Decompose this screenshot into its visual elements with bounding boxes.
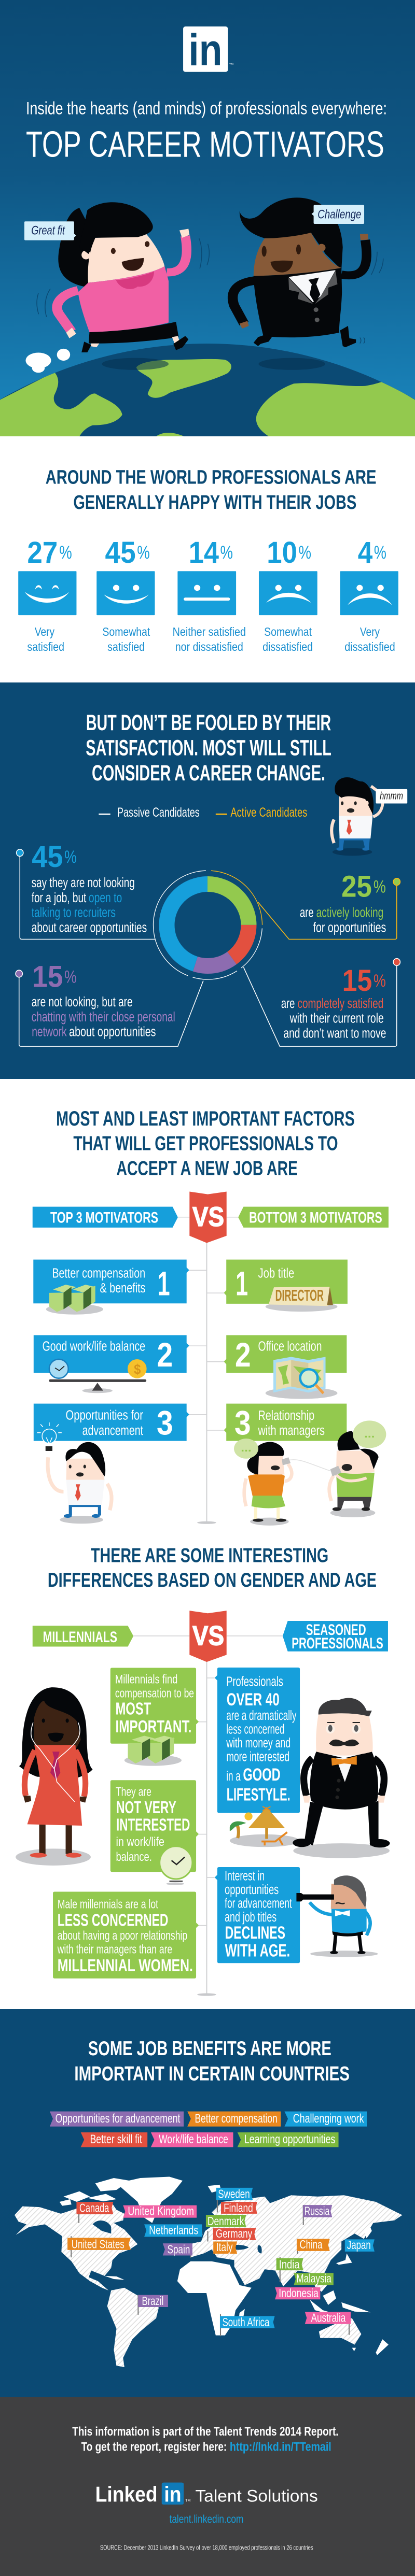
icon: LinkedIn logo: in <box>188 25 223 75</box>
callout: 15% completely satisfied: are <box>281 997 295 1011</box>
flag: United States <box>67 2236 131 2257</box>
logo: LinkedIn Talent Solutions: Linked <box>95 2482 158 2507</box>
stat: 27% very satisfied: satisfied <box>27 640 64 653</box>
card: relationship with managers <box>206 1403 347 1442</box>
card: less concerned: Male millennials are a lot <box>58 1898 158 1912</box>
stat: 14% neither: 14 <box>189 536 219 570</box>
panel: career change background <box>0 682 415 1079</box>
banner: bottom 3 motivators <box>238 1207 389 1228</box>
callout: 25% actively looking: 25 <box>341 870 372 904</box>
flag: United Kingdom: United Kingdom <box>128 2204 194 2217</box>
legend: benefit ribbons: Work/life balance <box>159 2132 228 2146</box>
banner: millennials: MILLENNIALS <box>43 1629 117 1646</box>
flag: Canada <box>76 2201 113 2223</box>
flag: Denmark: Denmark <box>208 2214 244 2228</box>
callout: 25% actively looking: for opportunities <box>313 920 386 935</box>
stat: 27% very satisfied: 27 <box>27 536 58 570</box>
stat: 10% somewhat dissatisfied: dissatisfied <box>262 640 313 653</box>
flag: Russia <box>303 2204 332 2225</box>
card: relationship with managers: Relationship <box>258 1408 314 1423</box>
panel: career change <box>16 710 407 1130</box>
stat: 45% somewhat satisfied: % <box>137 543 150 563</box>
callout: 45% open to recruiters: about career opportunities <box>32 920 147 935</box>
heading: don't be fooled <box>86 710 331 785</box>
flag: Brazil <box>137 2294 168 2315</box>
flag: Australia <box>305 2311 351 2335</box>
card: less concerned: with their managers than are <box>57 1942 172 1956</box>
callout: great fit: Great fit <box>31 223 65 237</box>
card: interest declines with age: Interest in <box>225 1869 265 1884</box>
callout: 25% actively looking: actively looking <box>316 905 383 920</box>
card: less concerned: about having a poor relationship <box>58 1929 187 1943</box>
flag: Italy: Italy <box>216 2240 233 2254</box>
stat: 27% very satisfied: Very <box>35 625 55 638</box>
logo: LinkedIn Talent Solutions: TM <box>185 2498 190 2503</box>
legend: benefit ribbons: Learning opportunities <box>244 2132 335 2146</box>
card: over 40 good lifestyle: with money and <box>226 1736 290 1750</box>
character: mustached man <box>293 1698 390 1858</box>
card: better compensation: & benefits <box>100 1281 146 1296</box>
flag: India: India <box>279 2258 300 2271</box>
timeline spine <box>133 1635 283 1996</box>
panel: countries background <box>0 2009 415 2397</box>
stat: 10% somewhat dissatisfied <box>259 536 317 653</box>
card: not very interested: balance. <box>116 1850 152 1864</box>
card: job title: Job title <box>258 1266 294 1280</box>
stat: 45% somewhat satisfied: satisfied <box>107 640 145 653</box>
card: not very interested <box>110 1780 206 1885</box>
icon: dust clouds <box>25 349 70 373</box>
stat: 45% somewhat satisfied <box>96 536 155 653</box>
logo: LinkedIn Talent Solutions <box>95 2482 318 2507</box>
stat: 10% somewhat dissatisfied: 10 <box>267 536 297 570</box>
card: over 40 good lifestyle: GOOD <box>243 1765 281 1785</box>
flag: Sweden <box>216 2187 253 2212</box>
flag: Russia: Russia <box>305 2204 330 2217</box>
call to action: To get the report, register here: <box>81 2440 227 2454</box>
stat: 14% neither <box>173 536 246 653</box>
flag: Brazil: Brazil <box>142 2294 163 2308</box>
legend: benefit ribbons: Better compensation <box>195 2112 278 2126</box>
card: over 40 good lifestyle: OVER 40 <box>227 1690 280 1710</box>
character: millennial woman <box>16 1687 93 1866</box>
character: man with spyglass <box>296 1875 378 1957</box>
card: relationship with managers: with managers <box>258 1424 325 1438</box>
callout: 15% completely satisfied: with their current role <box>289 1011 384 1026</box>
stat: 4% very dissatisfied: dissatisfied <box>344 640 395 653</box>
heading: most and least, remaining lines: ACCEPT A NEW JOB ARE <box>116 1157 298 1179</box>
character: two people talking through cans: ... <box>241 1442 252 1454</box>
flag: Netherlands: Netherlands <box>149 2224 198 2237</box>
panel: countries <box>15 2038 403 2367</box>
badge: VS: VS <box>192 1202 224 1232</box>
globe <box>0 344 415 436</box>
logo: LinkedIn Talent Solutions: Talent Solutions <box>196 2487 318 2505</box>
character: thinking man <box>331 777 383 856</box>
stat: 4% very dissatisfied <box>340 536 398 653</box>
stat: 10% somewhat dissatisfied: Somewhat <box>264 625 312 638</box>
card: not very interested: They are <box>116 1785 151 1799</box>
heading: gender and age <box>48 1544 377 1591</box>
flag: Canada: Canada <box>79 2201 109 2214</box>
card: opportunities for advancement: Opportunities for <box>66 1408 143 1422</box>
card: work life balance: 2 <box>157 1335 173 1374</box>
flag: Sweden: Sweden <box>218 2187 250 2200</box>
panel: job satisfaction background <box>0 436 415 683</box>
card: interest declines with age: DECLINES <box>225 1923 285 1943</box>
banner: top 3 motivators: TOP 3 MOTIVATORS <box>50 1209 158 1227</box>
card: opportunities for advancement: advancement <box>82 1424 143 1438</box>
callout: 45% open to recruiters: say they are not looking <box>32 876 135 890</box>
callout: 15% completely satisfied: completely satisfied <box>297 997 383 1011</box>
card: opportunities for advancement: 3 <box>157 1403 173 1442</box>
callout: great fit <box>24 221 76 240</box>
callout: 25% actively looking: % <box>374 877 386 897</box>
callout: challenge <box>312 205 364 224</box>
callout: 45% open to recruiters: for a job, but <box>32 891 86 905</box>
flag: Germany: Germany <box>216 2227 252 2240</box>
flag: Spain <box>163 2242 192 2258</box>
callout: 15% completely satisfied: % <box>374 971 386 991</box>
flag: Australia: Australia <box>311 2311 346 2325</box>
callout: 45% open to recruiters: talking to recruiters <box>32 905 116 920</box>
flag: Germany <box>207 2227 256 2242</box>
heading: gender and age: THERE ARE SOME INTERESTING <box>91 1544 328 1567</box>
banner: seasoned professionals <box>283 1621 388 1652</box>
card: office location: Office location <box>258 1340 322 1354</box>
callout: 15% chatting with network: chatting with their close personal <box>32 1010 175 1024</box>
card: interest declines with age: for advancement <box>225 1897 292 1911</box>
card: not very interested: INTERESTED <box>116 1816 190 1835</box>
card: job title: DIRECTOR <box>275 1287 324 1304</box>
card: over 40 good lifestyle <box>206 1668 300 1813</box>
callout: hmmm: hmmm <box>380 790 403 802</box>
logo: LinkedIn Talent Solutions: in <box>164 2482 181 2507</box>
card: interest declines with age: opportunities <box>225 1883 279 1897</box>
stat: 4% very dissatisfied: 4 <box>358 536 373 570</box>
stat: 14% neither: Neither satisfied <box>173 625 246 638</box>
panel: job satisfaction <box>18 466 398 653</box>
heading: generally happy <box>46 466 377 514</box>
badge: VS: VS <box>192 1620 224 1651</box>
panel: footer <box>72 2425 339 2552</box>
card: work life balance <box>34 1335 206 1393</box>
callout: 45% open to recruiters: 45 <box>32 840 63 874</box>
callout: 15% completely satisfied: 15 <box>342 964 372 998</box>
card: relationship with managers: 3 <box>234 1403 251 1442</box>
card: interest declines with age: WITH AGE. <box>225 1941 290 1961</box>
legend: benefit ribbons <box>50 2111 367 2147</box>
flag: India <box>276 2257 303 2282</box>
card: interest declines with age: and job titles <box>225 1910 276 1925</box>
card: over 40 good lifestyle: less concerned <box>226 1722 284 1737</box>
banner: top 3 motivators <box>33 1207 178 1228</box>
card: office location: 2 <box>235 1335 251 1374</box>
card: opportunities for advancement <box>34 1403 206 1442</box>
card: compensation most important: MOST <box>115 1700 151 1719</box>
card: over 40 good lifestyle: Professionals <box>226 1675 283 1689</box>
panel: motivators and differences background <box>0 1079 415 2009</box>
heading: job benefits by country: SOME JOB BENEFITS ARE MORE <box>88 2038 331 2060</box>
card: job title <box>206 1260 348 1312</box>
icon: LinkedIn logo: TM <box>229 63 233 66</box>
world map <box>15 2177 403 2367</box>
card: interest declines with age <box>206 1867 300 1963</box>
stat: 14% neither: % <box>220 543 233 563</box>
heading: most and least, remaining lines <box>73 1132 338 1179</box>
stat: 10% somewhat dissatisfied: % <box>299 543 311 563</box>
callout: 45% open to recruiters <box>17 840 155 940</box>
badge: VS <box>189 1191 227 1243</box>
card: over 40 good lifestyle: are a dramatically <box>226 1709 297 1723</box>
callout: hmmm <box>376 789 407 803</box>
heading: job benefits by country <box>74 2038 350 2085</box>
legend: benefit ribbons: Opportunities for advancement <box>56 2112 181 2126</box>
card: better compensation: 1 <box>158 1264 170 1302</box>
flag: South Africa <box>220 2314 275 2336</box>
character: man in suit <box>233 197 383 347</box>
banner: seasoned professionals: SEASONED <box>306 1621 366 1639</box>
card: less concerned <box>53 1892 206 1979</box>
callout: challenge: Challenge <box>317 207 361 221</box>
card: less concerned: MILLENNIAL WOMEN. <box>58 1956 193 1975</box>
panel: footer background <box>0 2397 415 2576</box>
card: over 40 good lifestyle: in a <box>226 1769 241 1784</box>
legend: benefit ribbons: Challenging work <box>293 2112 364 2126</box>
stat: 45% somewhat satisfied: 45 <box>105 536 136 570</box>
stat: 27% very satisfied: % <box>59 543 72 563</box>
flag: Japan: Japan <box>347 2238 371 2252</box>
callout: 25% actively looking <box>258 870 400 940</box>
chart: candidate donut <box>154 871 262 979</box>
callout: 15% chatting with network: 15 <box>32 960 63 994</box>
call to action <box>72 2425 339 2454</box>
callout: 15% chatting with network <box>16 960 203 1046</box>
flag: Malaysia: Malaysia <box>296 2272 331 2285</box>
card: office location <box>206 1335 347 1399</box>
card: better compensation <box>33 1260 206 1315</box>
card: over 40 good lifestyle: more interested <box>226 1749 289 1764</box>
callout: 45% open to recruiters: open to <box>89 891 122 905</box>
panel: hero background <box>0 0 415 436</box>
stat: 4% very dissatisfied: % <box>374 543 386 563</box>
character: two people talking through cans <box>234 1420 386 1526</box>
legend: benefit ribbons: Better skill fit <box>90 2132 142 2146</box>
panel: motivators <box>33 1132 389 1526</box>
flag: Spain: Spain <box>167 2242 190 2256</box>
callout: 25% actively looking: are <box>300 905 314 920</box>
flag: South Africa: South Africa <box>223 2315 270 2329</box>
card: not very interested: in work/life <box>116 1835 164 1849</box>
icon: beach <box>230 1806 300 1847</box>
card: less concerned: LESS CONCERNED <box>58 1911 168 1930</box>
card: not very interested: NOT VERY <box>116 1798 176 1817</box>
card: work life balance: Good work/life balance <box>43 1340 145 1354</box>
legend <box>99 806 307 820</box>
badge: VS <box>189 1611 227 1662</box>
card: better compensation: Better compensation <box>52 1266 145 1280</box>
hero header and characters <box>24 25 387 352</box>
character: man with idea <box>37 1422 112 1524</box>
stat: 27% very satisfied <box>18 536 76 653</box>
card: work life balance: $ <box>134 1362 141 1377</box>
callout: 15% completely satisfied <box>243 959 400 1046</box>
stat: 45% somewhat satisfied: Somewhat <box>102 625 150 638</box>
card: compensation most important: Millennials find <box>115 1672 177 1686</box>
stat: 4% very dissatisfied: Very <box>360 625 380 638</box>
panel: gender and age <box>16 1544 390 1996</box>
legend: Active Candidates <box>230 806 307 820</box>
character: woman in pink <box>37 202 209 352</box>
flag: China: China <box>300 2238 323 2251</box>
banner: millennials <box>33 1626 133 1647</box>
card: compensation most important <box>110 1668 206 1766</box>
legend: Passive Candidates <box>117 806 200 820</box>
timeline spine <box>178 1217 238 1524</box>
callout: 15% chatting with network: are not looking, but are <box>32 995 133 1009</box>
callout: 45% open to recruiters: % <box>64 847 77 867</box>
card: compensation most important: IMPORTANT. <box>115 1717 191 1737</box>
callout: 15% chatting with network: about opportunities <box>69 1024 156 1040</box>
character: two people talking through cans: ... <box>364 1428 375 1440</box>
flag: United States: United States <box>72 2237 125 2251</box>
callout: 15% chatting with network: network <box>32 1024 67 1040</box>
call to action: http://lnkd.in/TTemail <box>230 2440 331 2454</box>
stat: 14% neither: nor dissatisfied <box>175 640 243 653</box>
card: job title: 1 <box>236 1264 248 1302</box>
card: compensation most important: compensation to be <box>115 1687 194 1701</box>
flag: Finland: Finland <box>224 2201 253 2214</box>
flag: Indonesia: Indonesia <box>279 2286 319 2300</box>
card: over 40 good lifestyle: LIFESTYLE. <box>227 1785 290 1804</box>
callout: 15% chatting with network: % <box>64 967 77 987</box>
website: talent.linkedin.com <box>170 2513 243 2526</box>
